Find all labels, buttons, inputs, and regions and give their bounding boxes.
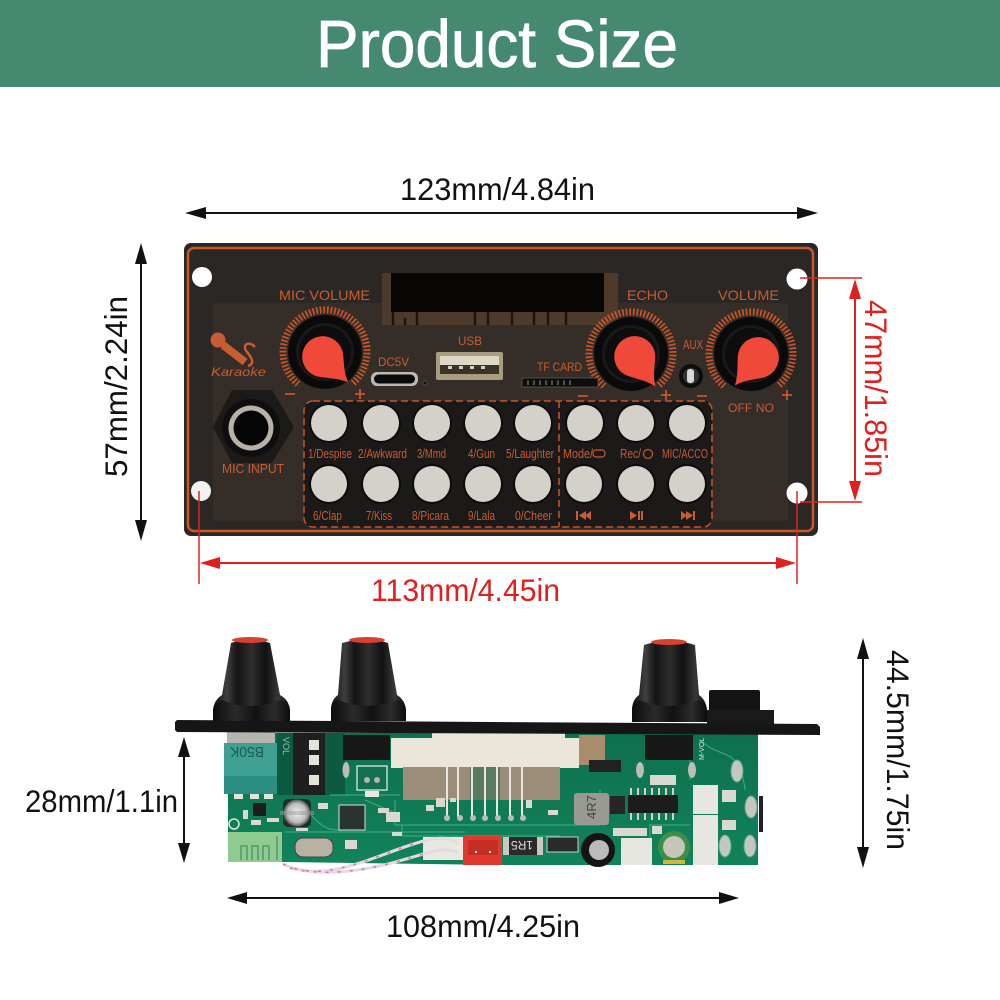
button labels: 5/Laughter (506, 447, 554, 461)
teal potentiometer (224, 732, 277, 794)
dark solder mask area (277, 733, 345, 795)
side view: knob 2 (331, 637, 406, 721)
button labels: 4/Gun (468, 447, 495, 461)
pcb traces (285, 740, 745, 840)
4R7 inductor (574, 793, 609, 825)
electrolytic capacitor left (280, 799, 314, 827)
J4 connector outline (357, 766, 387, 797)
small ic (253, 803, 266, 816)
dimension: board depth 28mm (25, 737, 190, 863)
red connector (463, 836, 502, 865)
green PCB (228, 733, 758, 865)
USB port (436, 352, 503, 380)
button labels: 2/Awkward (358, 447, 407, 461)
silver through-hole joints (719, 760, 757, 857)
dimension: panel width 123mm (185, 171, 818, 219)
side view: black faceplate edge (175, 720, 820, 735)
red measurement: hole spacing height 47mm: 47mm/1.85in (858, 300, 894, 477)
brown module corner (579, 735, 605, 765)
1R5 inductor: 1R5 (511, 838, 533, 852)
crystal (295, 838, 333, 857)
side view: knob 1 (213, 637, 290, 721)
button labels: 1/Despise (308, 447, 352, 461)
capacitor green gold (658, 831, 690, 864)
panel labels: MIC VOLUME (279, 287, 370, 303)
target mark (229, 819, 239, 829)
side connector (759, 796, 763, 832)
display window (382, 273, 618, 325)
ribbon wire (283, 838, 458, 872)
panel labels: USB (458, 336, 482, 348)
panel labels: AUX (683, 338, 704, 352)
title: Product Size (316, 7, 678, 82)
red measurement: hole spacing width 113mm (199, 491, 797, 608)
mic dark pot (327, 735, 390, 778)
mic input jack (213, 390, 294, 463)
red measurement: hole spacing height 47mm (800, 278, 894, 502)
ic SOIC (610, 788, 678, 820)
knob: mic volume (283, 310, 367, 397)
side view: mic jack (707, 690, 774, 724)
panel: front faceplate (184, 243, 818, 536)
dimension: total depth 44.5mm (857, 638, 916, 868)
USB-C port (371, 372, 427, 386)
button labels: Rec/ (620, 447, 641, 461)
teal potentiometer: B50K (230, 743, 264, 760)
display module: metal (403, 767, 560, 821)
button labels: 6/Clap (313, 509, 342, 523)
AUX jack (679, 364, 703, 388)
dimension: panel height 57mm: 57mm/2.24in (98, 296, 134, 477)
icon: karaoke microphone: Karaoke (211, 365, 266, 379)
dimension: board width 108mm (227, 892, 739, 944)
m-vol dark pot: M-VOL (699, 738, 706, 760)
button labels: 0/Cheer (515, 509, 552, 523)
red measurement: hole spacing width 113mm: 113mm/4.45in (371, 572, 560, 608)
title banner (0, 0, 1000, 87)
vol silk label: VOL (281, 737, 291, 755)
button labels: 9/Lala (468, 509, 495, 523)
dimension: board width 108mm: 108mm/4.25in (386, 908, 580, 944)
panel labels: DC5V (378, 357, 409, 369)
1R5 inductor (503, 837, 543, 855)
connector white right lower (693, 815, 718, 865)
mounting holes (191, 267, 808, 504)
diode (547, 837, 578, 852)
transistor (589, 760, 621, 772)
panel labels (222, 287, 792, 476)
button labels: 7/Kiss (366, 509, 392, 523)
button labels: 8/Picara (412, 509, 449, 523)
panel labels: VOLUME (718, 287, 779, 303)
dimension: total depth 44.5mm: 44.5mm/1.75in (880, 650, 916, 850)
panel labels: OFF NO (728, 403, 774, 415)
dimension: panel height 57mm (98, 243, 147, 541)
buttons (309, 403, 707, 504)
solder pads (234, 740, 319, 799)
side view: circuit board (224, 732, 763, 872)
QFN chip (339, 805, 365, 830)
small smd (243, 775, 736, 849)
4R7 inductor: 4R7 (584, 795, 599, 819)
connector white right upper (693, 785, 718, 814)
m-vol dark pot (636, 735, 706, 778)
display module: cream bar (391, 733, 579, 768)
white wire connector (423, 837, 463, 860)
knob: echo (589, 312, 673, 398)
bluetooth antenna (228, 832, 282, 862)
panel labels: TF CARD (537, 362, 582, 374)
knob: volume (709, 312, 793, 399)
dimension: board depth 28mm: 28mm/1.1in (25, 783, 178, 819)
side view: knob 3 (632, 639, 707, 722)
panel labels: MIC INPUT (222, 461, 284, 476)
button labels: Mode/ (563, 447, 593, 461)
dimension: panel width 123mm: 123mm/4.84in (400, 171, 595, 207)
dashed button group: sound effects (304, 401, 712, 527)
button labels: MIC/ACCO (662, 447, 708, 461)
left potentiometer block (293, 733, 325, 795)
capacitor black (581, 833, 615, 867)
panel labels: ECHO (627, 287, 668, 303)
TF card slot (522, 378, 598, 387)
connector white small (621, 838, 652, 865)
button labels: 3/Mmd (417, 447, 446, 461)
icon: karaoke microphone (210, 332, 266, 379)
button labels (308, 447, 708, 523)
